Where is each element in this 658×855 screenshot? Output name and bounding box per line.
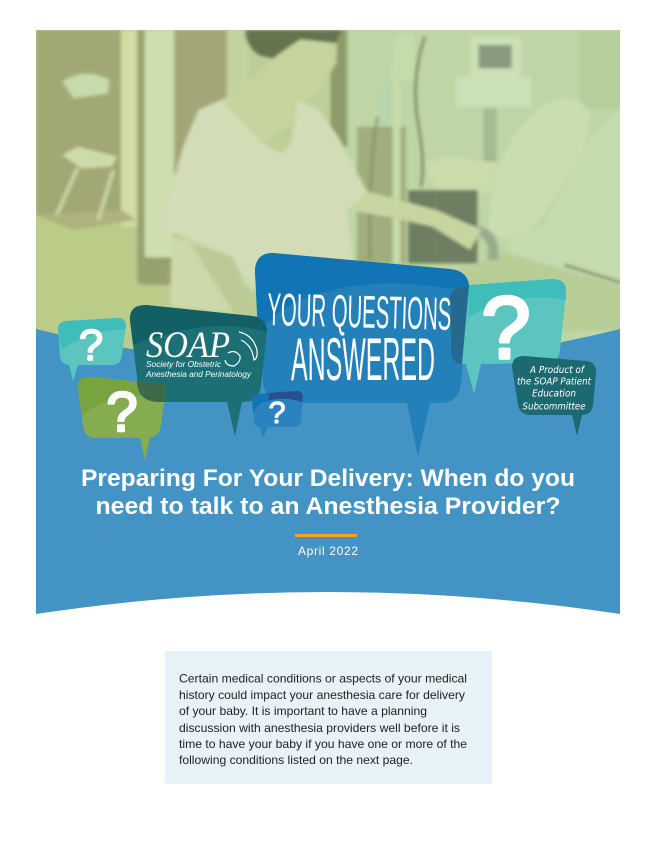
society name — [145, 359, 252, 379]
product text — [517, 365, 591, 412]
woman arms — [192, 244, 246, 313]
stool — [62, 74, 110, 98]
blue cover panel — [36, 329, 620, 614]
bubble: large teal question mark: ? — [482, 278, 530, 377]
product text: A Product of — [529, 365, 586, 376]
intro text panel — [165, 651, 492, 784]
bubble: your questions answered: ANSWERED — [291, 326, 435, 393]
society name: Society for Obstetric — [146, 359, 222, 369]
IV stand — [391, 33, 415, 82]
bubble: product of SOAP subcommittee — [512, 356, 596, 436]
title: Preparing For Your Delivery: When do you — [81, 465, 575, 492]
intro paragraph — [179, 672, 467, 767]
bubble: green question mark — [78, 377, 165, 460]
intro paragraph: time to have your baby if you have one or more of the — [179, 737, 467, 751]
bubble: large teal question mark — [450, 278, 566, 394]
orange divider — [295, 534, 357, 537]
product text: Subcommittee — [522, 402, 586, 412]
product text: Education — [532, 388, 576, 400]
society name: Anesthesia and Perinatology — [145, 369, 252, 379]
hero photo: patient in hospital room — [36, 30, 623, 350]
bubble: small blue question mark — [252, 391, 303, 438]
bed rail and bed — [489, 98, 591, 243]
cart — [425, 157, 498, 193]
SOAP wordmark: SOAP — [146, 325, 230, 366]
logo icon: mother and baby — [225, 332, 257, 366]
bubble: small teal question mark — [58, 318, 126, 381]
title — [81, 465, 575, 520]
bubble: SOAP logo — [130, 305, 267, 436]
product text: the SOAP Patient — [517, 376, 591, 388]
intro paragraph: history could impact your anesthesia care for delivery — [179, 688, 465, 702]
bubble: your questions answered — [255, 253, 469, 457]
bubble: small blue question mark: ? — [268, 395, 286, 430]
intro paragraph: of your baby. It is important to have a planning — [179, 704, 427, 718]
bubble: green question mark: ? — [106, 380, 138, 443]
monitor — [470, 37, 521, 80]
woman gown — [161, 100, 368, 290]
heading text — [267, 283, 452, 393]
title: need to talk to an Anesthesia Provider? — [96, 493, 560, 520]
bubble: small teal question mark: ? — [79, 321, 103, 370]
woman hair and skin — [245, 30, 342, 60]
date: April 2022 — [298, 544, 358, 558]
intro paragraph: following conditions listed on the next page. — [179, 753, 413, 767]
intro paragraph: Certain medical conditions or aspects of your medical — [179, 672, 467, 686]
intro paragraph: discussion with anesthesia providers well before it is — [179, 721, 460, 735]
